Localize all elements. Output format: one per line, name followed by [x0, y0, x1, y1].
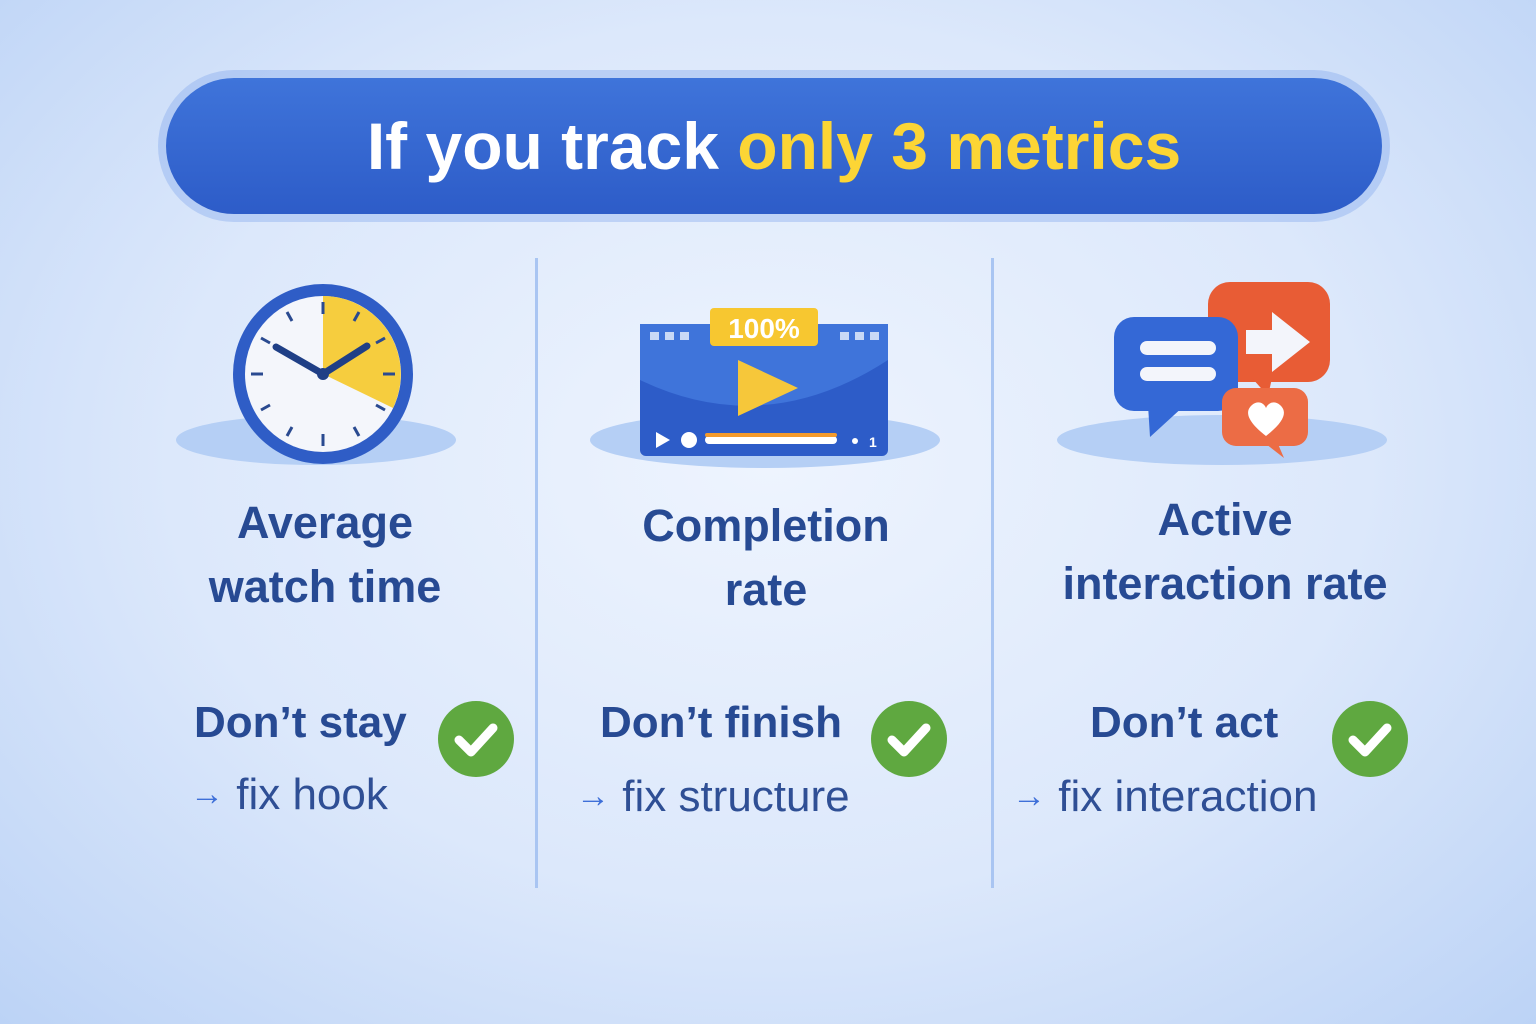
panel: active interaction rate [1012, 282, 1408, 821]
icon: video player: 100% [728, 313, 800, 344]
callout text: Don’t act [1090, 698, 1278, 747]
icon: clock [176, 284, 456, 465]
callout text: Don’t finish [600, 698, 842, 747]
heading: Active [1157, 494, 1293, 545]
heading: Completion [642, 500, 890, 551]
heading [642, 500, 890, 615]
icon: video player [590, 308, 940, 468]
panel: average watch time [176, 284, 514, 819]
fix text: → fix hook [190, 770, 388, 819]
icon: check [871, 701, 947, 777]
heading: rate [725, 564, 807, 615]
heading: watch time [209, 561, 441, 612]
icon: chat bubbles [1057, 282, 1387, 465]
heading: interaction rate [1062, 558, 1388, 609]
icon: check [438, 701, 514, 777]
callout text: Don’t stay [194, 698, 407, 747]
icon: video player: 1 [869, 434, 877, 450]
icon: check [1332, 701, 1408, 777]
title banner [166, 78, 1382, 214]
dividers [535, 258, 538, 888]
fix text: → fix structure [576, 772, 850, 821]
panel: completion rate [576, 308, 947, 821]
fix text: → fix interaction [1012, 772, 1317, 821]
heading [208, 497, 441, 612]
title text: If you track only 3 metrics [367, 109, 1181, 183]
heading [1062, 494, 1388, 609]
heading: Average [237, 497, 413, 548]
